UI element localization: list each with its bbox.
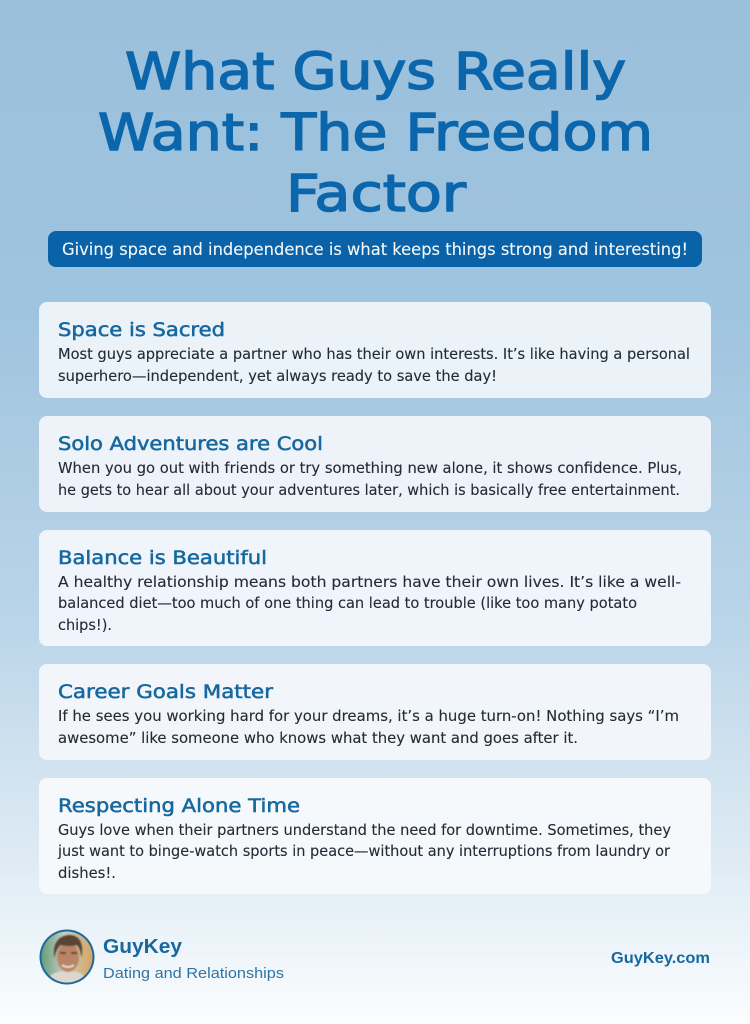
panel: Balance is Beautiful: Balance is Beautiful: [58, 547, 267, 569]
panel: Career Goals Matter: Career Goals Matter: [58, 681, 273, 703]
panel: Space is Sacred: Most guys appreciate a partner who has their own interests. It’s like having a personal: [58, 345, 690, 363]
title: Factor: [286, 165, 466, 224]
panel: Respecting Alone Time: Guys love when their partners understand the need for downtime. Sometimes, they: [58, 821, 671, 839]
panel: Balance is Beautiful: A healthy relationship means both partners have their own lives. It’s like a well-: [58, 573, 681, 591]
subtitle banner: Giving space and independence is what keeps things strong and interesting!: [62, 240, 688, 259]
panel: Space is Sacred: superhero—independent, yet always ready to save the day!: [58, 367, 497, 385]
panel: Balance is Beautiful: [39, 530, 711, 646]
website: GuyKey.com: [611, 950, 710, 967]
icon: author avatar: [40, 930, 94, 984]
panel: Respecting Alone Time: dishes!.: [58, 864, 116, 882]
panel: Balance is Beautiful: balanced diet—too much of one thing can lead to trouble (like too many potato: [58, 594, 637, 612]
panel: Balance is Beautiful: chips!).: [58, 616, 112, 634]
panel: Solo Adventures are Cool: When you go out with friends or try something new alone, it shows confidence. Plus,: [58, 459, 682, 477]
panel: Space is Sacred: Space is Sacred: [58, 319, 225, 341]
panel: Career Goals Matter: If he sees you working hard for your dreams, it’s a huge turn-on! Nothing says “I’m: [58, 707, 679, 725]
panel: Career Goals Matter: [39, 664, 711, 760]
title: Want: The Freedom: [98, 104, 653, 163]
panel: Solo Adventures are Cool: he gets to hear all about your adventures later, which is basically free entertainment.: [58, 481, 680, 499]
brand name: GuyKey: [103, 936, 183, 958]
panel: Solo Adventures are Cool: Solo Adventures are Cool: [58, 433, 323, 455]
subtitle banner: [48, 231, 702, 267]
title: [98, 43, 653, 224]
panel: Career Goals Matter: awesome” like someone who knows what they want and goes after it.: [58, 729, 578, 747]
panel: Respecting Alone Time: just want to binge-watch sports in peace—without any interruptions from laundry or: [57, 842, 671, 860]
brand tagline: Dating and Relationships: [103, 965, 284, 982]
panel: Respecting Alone Time: Respecting Alone Time: [58, 795, 300, 817]
panel: Respecting Alone Time: [39, 778, 711, 894]
panel: Space is Sacred: [39, 302, 711, 398]
title: What Guys Really: [125, 43, 626, 102]
panel: Solo Adventures are Cool: [39, 416, 711, 512]
